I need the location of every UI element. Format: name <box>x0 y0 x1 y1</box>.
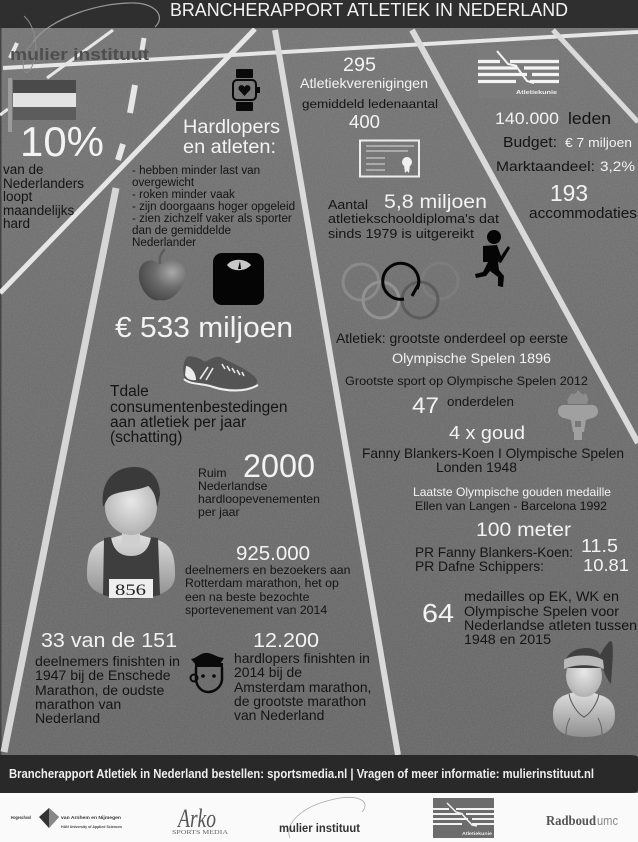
icon: smartwatch <box>233 69 260 111</box>
stat: 5,8 miljoen diplomas: atletiekschooldiploma's dat <box>328 211 499 226</box>
text: olympic facts: Grootste sport op Olympische Spelen 2012 <box>345 374 588 388</box>
stat: 5,8 miljoen diplomas: Aantal <box>328 197 368 212</box>
text: consumer spending: aan atletiek per jaar <box>110 414 246 431</box>
stat: 64 medals: Olympische Spelen voor <box>464 604 619 620</box>
stat: 12.200 finishers: hardlopers finishten in <box>234 650 370 666</box>
stat: 64 medals: medailles op EK, WK en <box>464 589 619 605</box>
stat: 295 clubs: 295 <box>343 55 376 76</box>
stat: 100 meter records: 11.5 <box>581 536 618 556</box>
text: Fanny Blankers-Koen gold: 4 x goud <box>449 423 525 443</box>
stat: 33 van de 151: 33 van de 151 <box>41 630 177 652</box>
stat: 33 van de 151: marathon van <box>35 696 121 712</box>
stat: 64 medals: 64 <box>422 598 454 628</box>
stat: 10 percent: hard <box>3 216 30 231</box>
heading: hardlopers en atleten: Hardlopers <box>183 116 280 138</box>
stat: 925.000 visitors: deelnemers en bezoekers aan <box>185 563 351 577</box>
stat: 12.200 finishers: 12.200 <box>253 630 319 652</box>
logo: mulier instituut <box>10 3 159 72</box>
partner logo strip <box>0 793 638 842</box>
stat: 295 clubs <box>300 55 438 132</box>
stat: atletiekunie facts: 140.000 <box>495 109 559 128</box>
stat: 925.000 visitors: 925.000 <box>236 542 310 565</box>
stat: 33 van de 151 <box>0 0 184 726</box>
stat: 64 medals: 1948 en 2015 <box>464 632 551 648</box>
stat: 5,8 miljoen diplomas: 5,8 miljoen <box>384 191 487 213</box>
text: olympic facts: 47 <box>412 393 439 418</box>
text: last olympic gold medal: Laatste Olympische gouden medaille <box>413 485 611 499</box>
stat: atletiekunie facts: € 7 miljoen <box>565 135 632 150</box>
stat: 12.200 finishers: 2014 bij de <box>234 664 302 680</box>
text: runner characteristics list: - zijn doorgaans hoger opgeleid <box>132 200 295 213</box>
logo: Radboudumc: Radboud <box>546 814 596 829</box>
logo: Hogeschool van Arnhem en Nijmegen: Hogeschool <box>11 815 31 820</box>
stat: 100 meter records: PR Dafne Schippers: <box>415 558 544 574</box>
text: consumer spending: (schatting) <box>110 429 182 446</box>
text: runner characteristics list <box>0 0 298 249</box>
logo: Hogeschool van Arnhem en Nijmegen: HAN University of Applied Sciences <box>61 825 122 829</box>
logo: mulier instituut: mulier instituut <box>279 823 360 835</box>
logo: atletiekunie <box>478 46 559 98</box>
text: Fanny Blankers-Koen gold: Fanny Blankers-Koen I Olympische Spelen <box>362 445 624 461</box>
stat: 2000 events <box>0 0 323 519</box>
stat: 10 percent: 10% <box>20 118 104 165</box>
stat: atletiekunie facts: Budget: <box>503 135 557 151</box>
text: olympic facts: Olympische Spelen 1896 <box>392 351 551 366</box>
stat: 64 medals: Nederlandse atleten tussen <box>464 618 637 634</box>
stat: atletiekunie facts <box>495 109 637 222</box>
stat: 12.200 finishers <box>0 0 375 723</box>
icon: apple <box>139 249 185 300</box>
stat: 5,8 miljoen diplomas: sinds 1979 is uitgereikt <box>328 226 474 241</box>
icon: runner <box>475 230 510 287</box>
stat: 100 meter records: 100 meter <box>476 520 572 541</box>
stat: 533 miljoen: € 533 miljoen <box>115 312 293 344</box>
stat: 10 percent: van de <box>3 162 44 177</box>
text: runner characteristics list: dan de gemiddelde <box>132 224 231 237</box>
text: last olympic gold medal: Ellen van Langen - Barcelona 1992 <box>415 499 607 513</box>
icon: female athlete <box>553 641 615 737</box>
text: olympic facts: Atletiek: grootste onderdeel op eerste <box>336 331 568 346</box>
stat: 2000 events: per jaar <box>198 505 240 519</box>
icon: running shoe <box>183 356 258 390</box>
stat: 10 percent: maandelijks <box>3 203 75 218</box>
icon: male athlete with bib: 856 <box>115 582 146 599</box>
icon: dutch flag <box>8 78 76 132</box>
stat: atletiekunie facts: accommodaties <box>529 205 637 222</box>
text: runner characteristics list: overgewicht <box>132 176 195 189</box>
text: runner characteristics list: - hebben minder last van <box>132 164 260 177</box>
stat: 12.200 finishers: van Nederland <box>234 707 324 723</box>
stat: 295 clubs: gemiddeld ledenaantal <box>302 97 438 111</box>
logo: Hogeschool van Arnhem en Nijmegen: van Arnhem en Nijmegen <box>61 815 121 820</box>
logo: Hogeschool van Arnhem en Nijmegen <box>11 808 122 829</box>
stat: atletiekunie facts: leden <box>568 109 611 128</box>
heading: hardlopers en atleten: en atleten: <box>183 136 276 158</box>
text: olympic facts <box>336 331 588 418</box>
footer bar <box>0 755 638 793</box>
stat: 100 meter records <box>415 520 629 575</box>
stat: 33 van de 151: deelnemers finishten in <box>35 653 180 669</box>
logo: Arko Sports Media: Arko <box>176 804 216 833</box>
icon: diploma <box>360 140 419 176</box>
stat: 295 clubs: Atletiekverenigingen <box>300 76 428 91</box>
stat: 2000 events: 2000 <box>243 448 315 484</box>
text: consumer spending: consumentenbestedingen <box>110 399 288 416</box>
stat: 100 meter records: 10.81 <box>583 555 629 575</box>
text: olympic facts: onderdelen <box>447 395 514 409</box>
stat: 10 percent: Nederlanders <box>3 176 84 191</box>
stat: 12.200 finishers: Amsterdam marathon, <box>234 679 371 695</box>
stat: 10 percent: loopt <box>3 189 33 204</box>
stat: 2000 events: Ruim <box>198 466 227 480</box>
stat: atletiekunie facts: Marktaandeel: <box>496 158 595 174</box>
logo: mulier instituut: mulier instituut <box>10 45 149 64</box>
icon: weighing scale <box>213 253 264 305</box>
text: runner characteristics list: - zien zichzelf vaker als sporter <box>132 212 292 225</box>
stat: 10 percent <box>0 0 104 231</box>
icon: runner head with cap <box>190 653 224 692</box>
logo: Radboudumc: umc <box>597 813 618 828</box>
text: Fanny Blankers-Koen gold: Londen 1948 <box>436 459 517 475</box>
text: runner characteristics list: Nederlander <box>132 236 196 249</box>
text: Fanny Blankers-Koen gold <box>362 423 624 475</box>
stat: 925.000 visitors: Rotterdam marathon, het op <box>185 576 339 590</box>
text: consumer spending <box>0 0 292 446</box>
logo: atletiekunie: Atletiekunie <box>516 90 557 96</box>
logo: atletiekunie: Atletiekunie <box>462 831 493 836</box>
stat: 64 medals <box>422 589 637 648</box>
stat: atletiekunie facts: 193 <box>550 180 588 206</box>
icon: male athlete with bib <box>87 467 175 599</box>
icon: olympic rings <box>343 263 458 318</box>
logo: mulier instituut <box>279 797 365 838</box>
heading: hardlopers en atleten <box>183 116 280 158</box>
stat: 33 van de 151: 1947 bij de Enschede <box>35 667 171 683</box>
stat: 33 van de 151: Nederland <box>35 710 100 726</box>
logo: Arko Sports Media: SPORTS MEDIA <box>172 829 228 836</box>
stat: 295 clubs: 400 <box>349 111 380 132</box>
stat: 100 meter records: PR Fanny Blankers-Koen: <box>415 544 573 560</box>
stat: atletiekunie facts: 3,2% <box>600 158 635 174</box>
logo: atletiekunie <box>433 798 494 838</box>
text: consumer spending: Tdale <box>110 383 149 400</box>
icon: olympic torch <box>558 390 598 440</box>
stat: 925.000 visitors: sportevenement van 2014 <box>185 603 327 617</box>
stat: 2000 events: Nederlandse <box>198 479 268 493</box>
stat: 12.200 finishers: de grootste marathon <box>234 693 366 709</box>
text: runner characteristics list: - roken minder vaak <box>132 188 235 201</box>
stat: 33 van de 151: Marathon, de oudste <box>35 682 164 698</box>
text: last olympic gold medal <box>413 485 611 513</box>
stat: 5,8 miljoen diplomas <box>328 191 499 241</box>
stat: 925.000 visitors <box>0 0 354 617</box>
stat: 925.000 visitors: een na beste bezochte <box>185 590 310 604</box>
header bar <box>0 0 638 28</box>
stat: 2000 events: hardloopevenementen <box>198 492 320 506</box>
